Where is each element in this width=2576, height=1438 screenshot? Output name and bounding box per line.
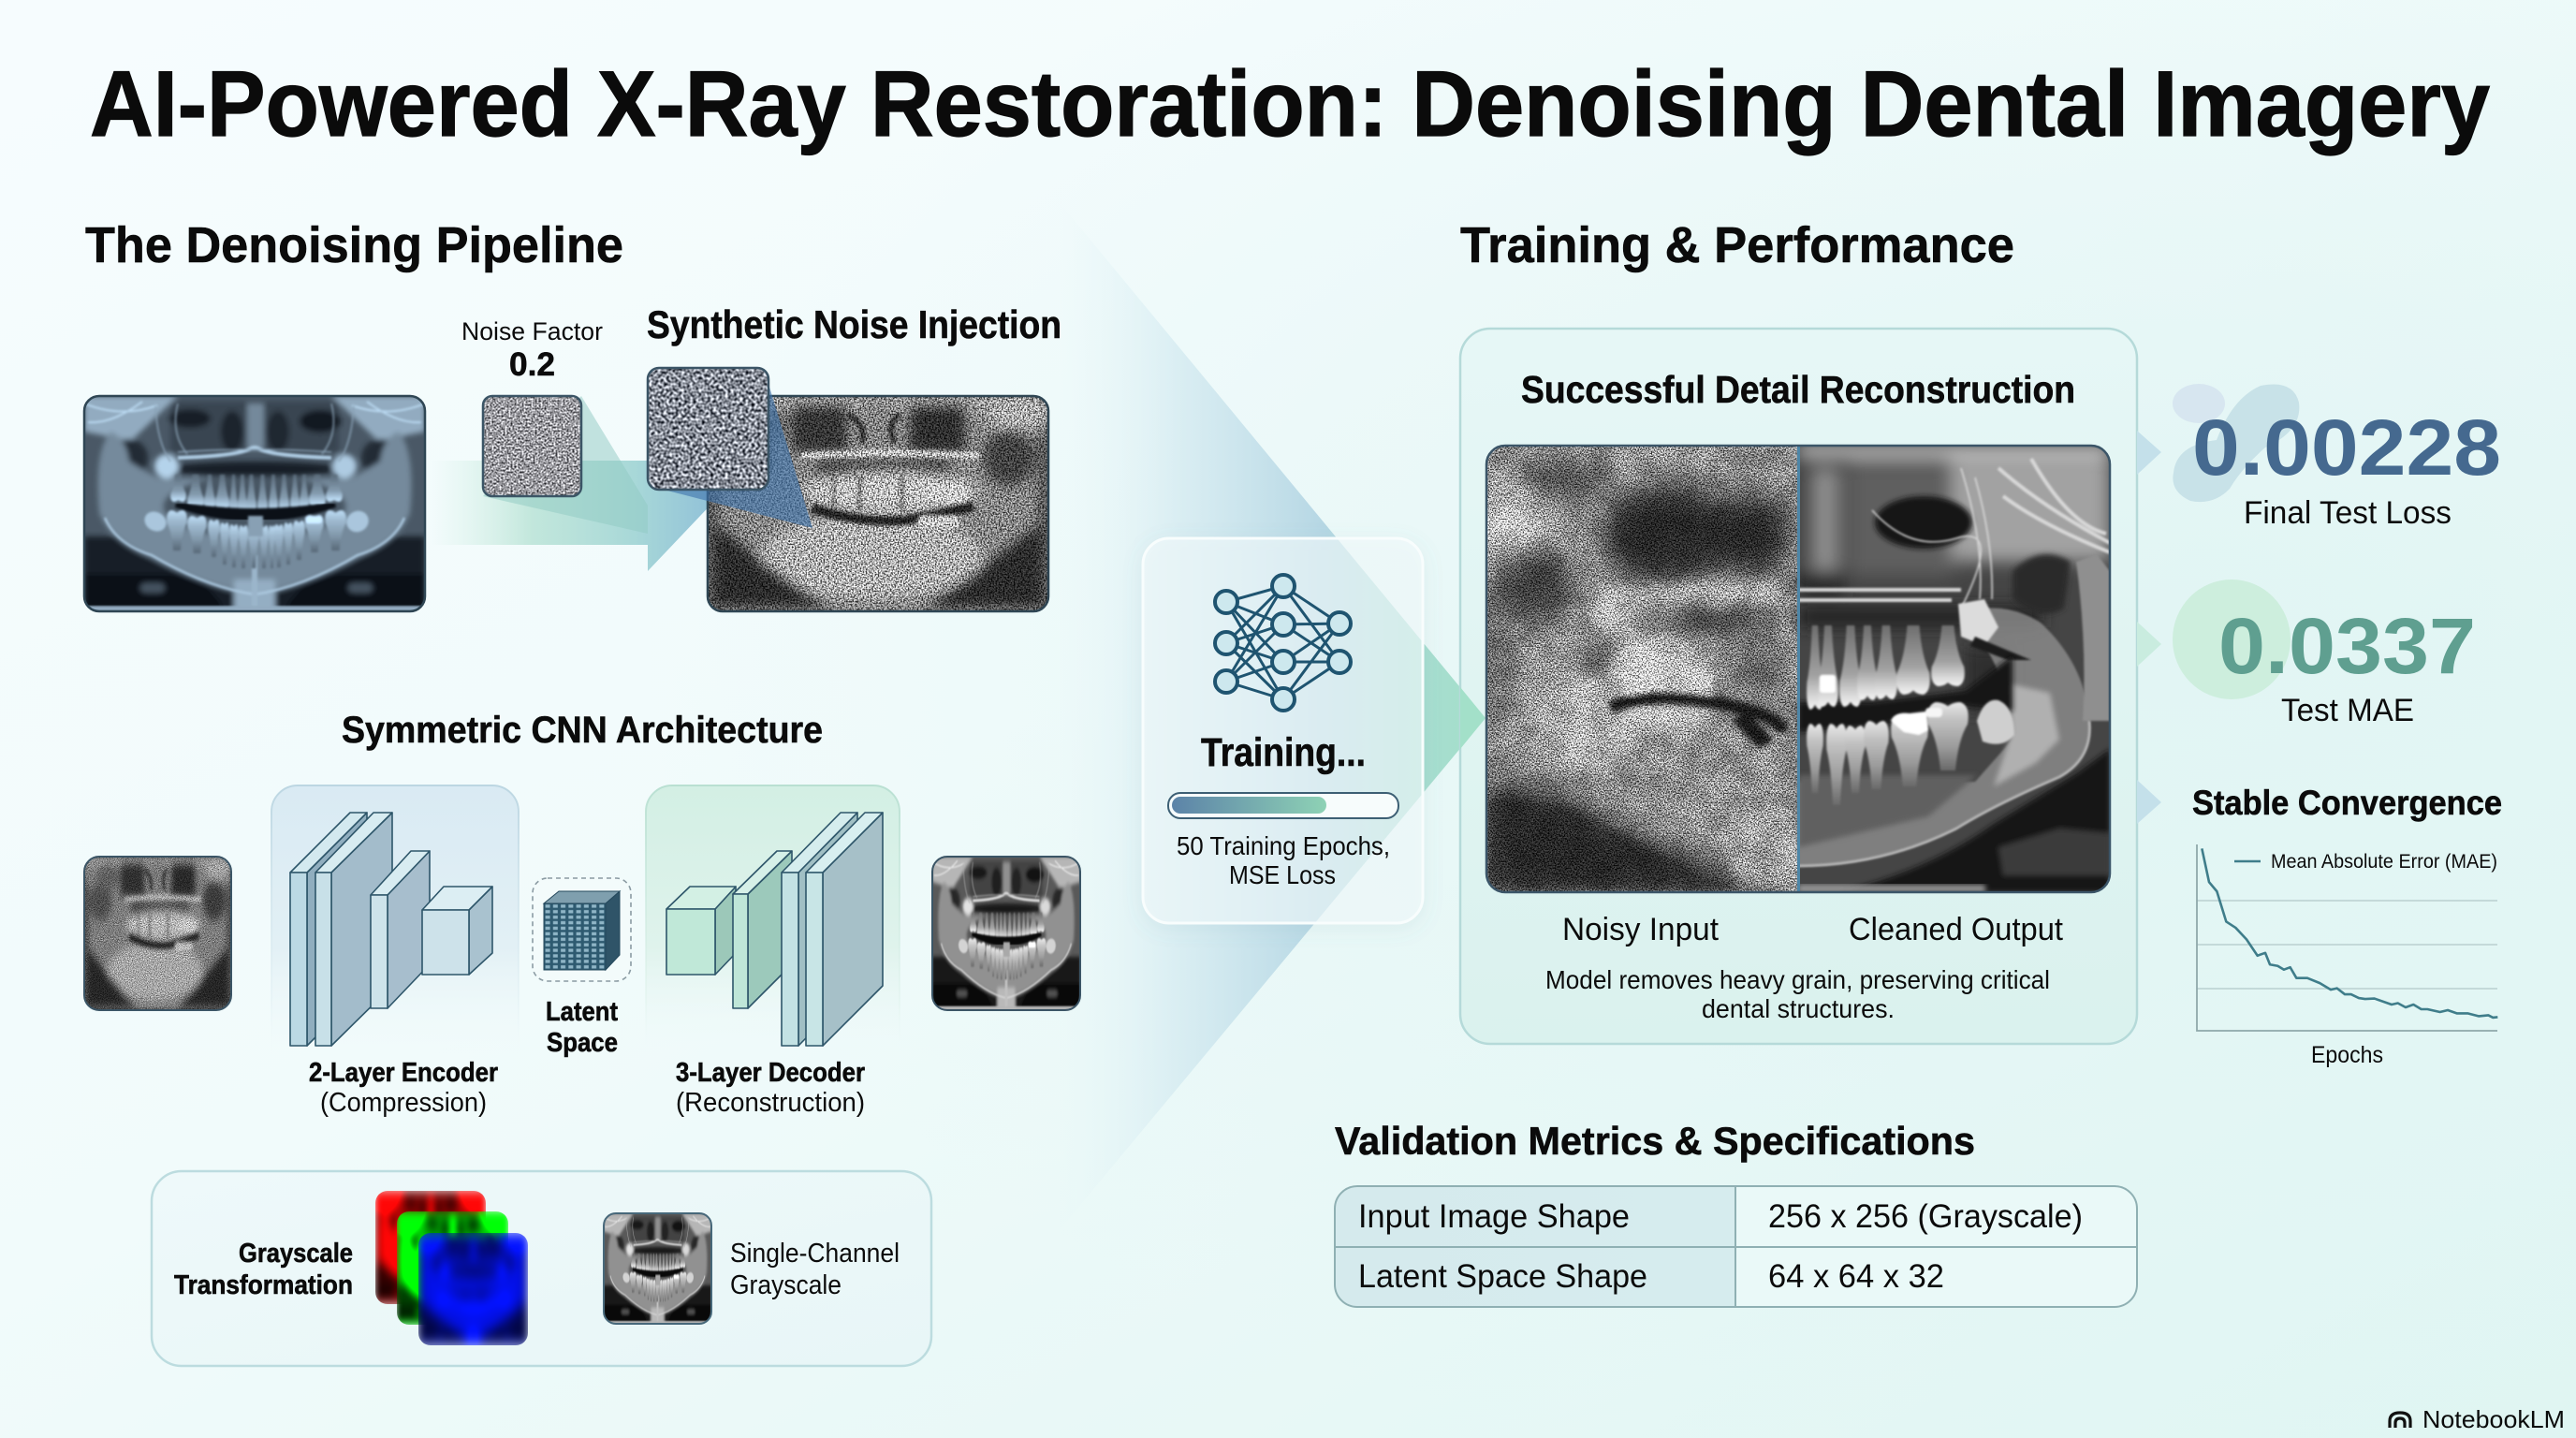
label: single channel grayscale: Grayscale [730,1270,842,1300]
image: clean dental x-ray [84,396,425,611]
label: latent space [546,997,618,1058]
mouth gap [1798,655,2012,732]
row: input image shape: Input Image Shape [1358,1198,1630,1235]
lower teeth [1807,700,2014,805]
label: single channel grayscale [730,1239,900,1300]
panel: successful detail reconstruction [1460,329,2137,1044]
metric: final test loss [2137,384,2501,531]
encoder layers [290,813,492,1046]
heading: the denoising pipeline: The Denoising Pipeline [85,217,623,273]
label: Test MAE [2281,693,2414,728]
divider [1797,446,1800,892]
label: encoder [309,1058,498,1118]
table: specifications [1335,1186,2137,1307]
value: 0.00228 [2192,404,2501,492]
overlay projection onto image [664,384,812,528]
label: latent space: Latent [546,997,618,1027]
text: training details: 50 Training Epochs, [1177,831,1390,860]
image: noisy input [84,857,231,1010]
row: latent space shape: 64 x 64 x 32 [1768,1258,1944,1295]
pointer [2137,780,2161,824]
label: training: Training... [1201,730,1366,775]
legend: Mean Absolute Error (MAE) [2271,851,2497,873]
icon: neural network [1215,575,1351,711]
decoder background [646,785,900,1055]
latent space cube [533,878,631,981]
label: grayscale transformation: Transformation [174,1270,353,1300]
image: noisy dental x-ray [708,396,1048,611]
heading: synthetic noise injection: Synthetic Noise Injection [647,302,1061,346]
label: grayscale transformation: Grayscale [239,1239,353,1269]
row: latent space shape [1358,1258,1944,1295]
label: noise factor: Noise Factor [461,317,603,345]
arrow: clean to noisy [431,440,719,571]
upper teeth [1807,625,1965,710]
pointer [2137,622,2161,667]
value: 0.0337 [2218,602,2476,690]
image border [1486,446,2110,892]
label: grayscale transformation [174,1239,353,1300]
cleaned half [1798,446,2110,892]
label: encoder: (Compression) [320,1088,487,1118]
heading: Stable Convergence [2192,784,2502,822]
text: training details [1177,831,1390,889]
label: encoder: 2-Layer Encoder [309,1058,498,1088]
icon: noise patch large [648,368,768,490]
row: input image shape: 256 x 256 (Grayscale) [1768,1198,2083,1235]
heading: successful detail reconstruction: Successful Detail Reconstruction [1521,368,2075,411]
label: noisy input: Noisy Input [1562,912,1720,947]
line: mae curve [2202,848,2497,1018]
label: decoder: 3-Layer Decoder [676,1058,865,1088]
label: cleaned output: Cleaned Output [1849,912,2064,947]
chart axes [2197,844,2497,1031]
caption: dental structures. [1702,994,1895,1023]
panel: synthetic noise injection [84,302,1061,611]
title: AI-Powered X-Ray Restoration: Denoising Dental Imagery [90,51,2490,155]
heading: validation metrics: Validation Metrics & Specifications [1335,1119,1975,1163]
decorative blob [2173,384,2299,502]
label: single channel grayscale: Single-Channel [730,1239,900,1269]
noise projection cone [483,396,648,534]
heading: symmetric cnn architecture: Symmetric CNN Architecture [342,710,823,751]
heading: training and performance: Training & Performance [1460,217,2014,273]
noisy half [1479,446,1816,899]
sinus cavities [1875,496,2071,614]
panel: symmetric cnn diagram [84,785,1080,1118]
lower dark and vertebra [1839,749,2110,892]
logo: notebooklm [2390,1405,2565,1433]
panel: grayscale transformation [152,1171,931,1366]
icon: noise patch small [483,396,581,496]
value: noise factor: 0.2 [509,346,555,383]
label: latent space: Space [547,1028,618,1058]
panel: training status card [1143,538,1423,923]
image stack: rgb channels [375,1191,528,1345]
wordmark: NotebookLM [2422,1405,2565,1433]
label: Final Test Loss [2244,495,2452,531]
image: before and after comparison [1479,446,2110,899]
large flow arrow behind centre [1058,200,1486,1232]
pointer [2137,431,2161,475]
metric: stable convergence chart [2137,780,2502,1068]
row: latent space shape: Latent Space Shape [1358,1258,1647,1295]
row: input image shape [1358,1198,2083,1235]
caption: Model removes heavy grain, preserving critical [1545,965,2050,994]
metric: test mae [2137,580,2476,728]
axis label: epochs: Epochs [2311,1042,2383,1068]
decorative circle [2173,580,2291,699]
bone lines [1798,459,2110,609]
text: training details: MSE Loss [1229,860,1336,889]
progress bar [1168,793,1398,818]
mandible [1798,608,2089,866]
icon: notebooklm mark [2390,1413,2410,1428]
decoder layers [666,813,883,1046]
image: single channel grayscale [604,1213,711,1324]
arrow tip over panel [1460,687,1486,749]
label: decoder [676,1058,865,1118]
label: decoder: (Reconstruction) [676,1088,865,1118]
image: cleaned output [932,857,1080,1010]
encoder background [271,785,519,1055]
caption [1545,965,2050,1023]
